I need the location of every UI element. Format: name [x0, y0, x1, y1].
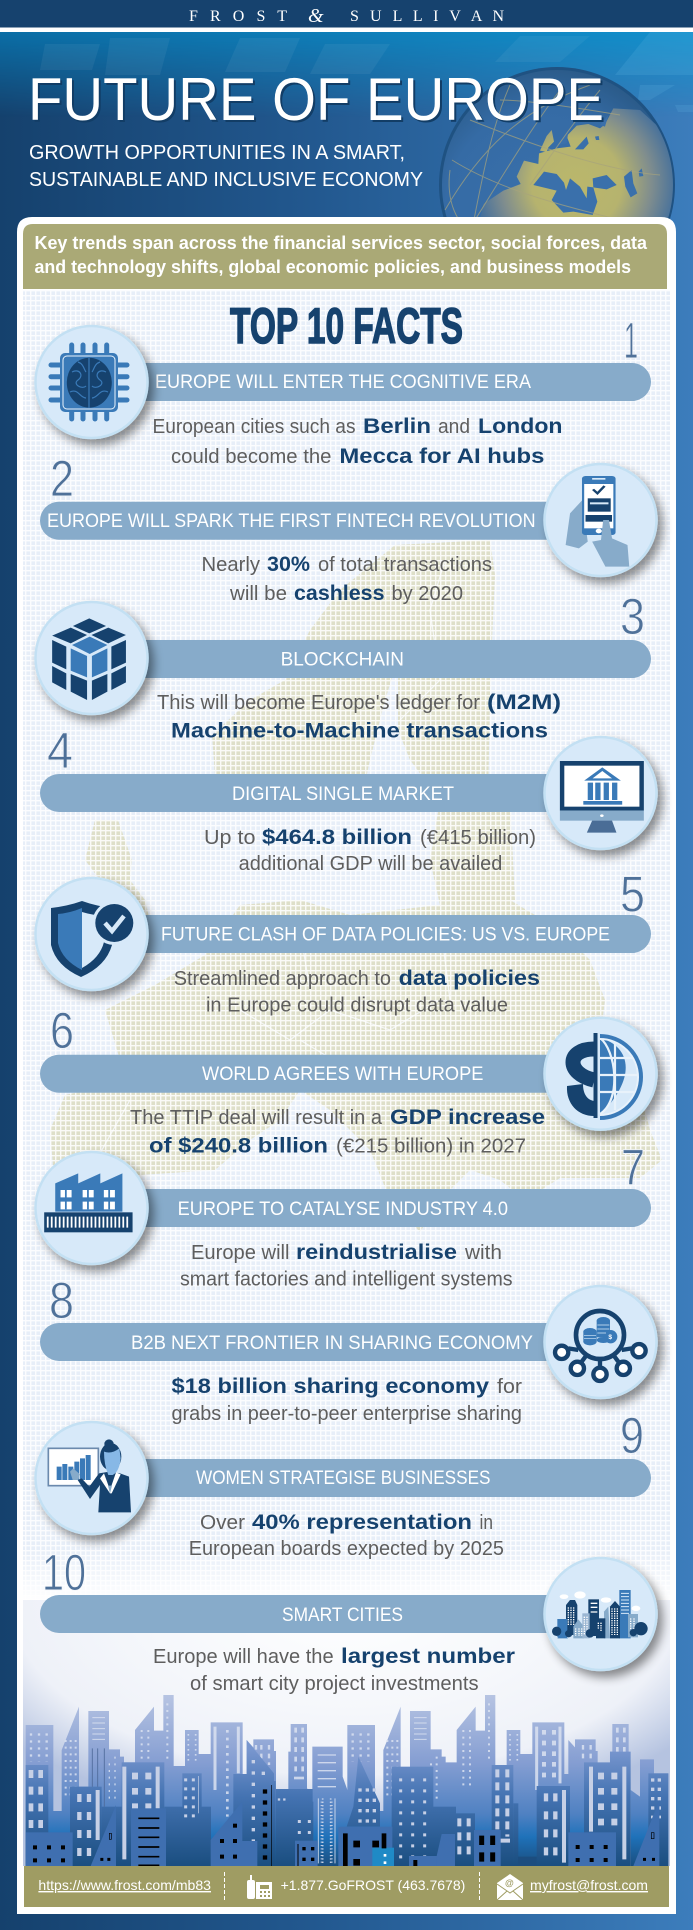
number 4: 4	[47, 722, 73, 779]
icon: chip with brain	[36, 326, 148, 438]
subtitle: SUSTAINABLE AND INCLUSIVE ECONOMY	[29, 168, 423, 191]
number 2: 2	[50, 450, 74, 507]
fact 7 text: reindustrialise	[296, 1240, 457, 1264]
fact 4 text: $464.8 billion	[262, 825, 412, 849]
number 10: 10	[42, 1544, 86, 1601]
fact 5 text: in Europe could disrupt data value	[206, 995, 508, 1017]
pill: fact 4 heading	[40, 774, 600, 812]
subtitle: GROWTH OPPORTUNITIES IN A SMART,	[29, 141, 405, 164]
fact 1 text: could become the	[171, 446, 332, 468]
fact 7 text	[180, 1240, 513, 1291]
icon: bank on monitor	[544, 737, 656, 849]
fact 2 text: of total transactions	[318, 554, 492, 576]
icon: factory	[36, 1152, 148, 1264]
fact 4 text: additional GDP will be availed	[239, 853, 502, 875]
land masses	[480, 108, 680, 220]
fact 7 text: Europe will	[191, 1242, 290, 1264]
fact 5 text: Streamlined approach to	[174, 968, 391, 990]
map of Europe	[50, 540, 662, 1232]
foreground buildings left	[26, 1806, 340, 1866]
fact 6	[40, 1002, 656, 1158]
icon: email: @	[505, 1878, 514, 1888]
fact 3	[36, 588, 651, 743]
icon: globe	[439, 67, 675, 219]
pill: fact 8 heading: B2B NEXT FRONTIER IN SHARING ECONOMY	[131, 1333, 533, 1354]
number 8: 8	[49, 1272, 74, 1329]
illustration: city skyline	[23, 1600, 670, 1866]
fact 1 text: London	[478, 414, 562, 438]
icon: coin network	[544, 1286, 656, 1398]
icon: email	[497, 1874, 523, 1900]
pill: fact 7 heading	[100, 1189, 651, 1227]
back buildings right	[347, 1695, 629, 1866]
fact 9 text	[189, 1510, 504, 1560]
fact 2 text: 30%	[267, 552, 310, 576]
icon: smart city	[544, 1558, 656, 1670]
fact 2 text: by 2020	[392, 583, 463, 605]
number 6: 6	[50, 1002, 74, 1059]
fact 6 text: The TTIP deal will result in a	[130, 1107, 383, 1129]
panel: contact footer	[24, 1866, 669, 1907]
top bar: Frost & Sullivan logo: S U L L I V A N	[350, 8, 504, 25]
fact 2 text	[202, 552, 492, 605]
fact 2 text: cashless	[294, 581, 385, 605]
fact 8 text: $18 billion sharing economy	[172, 1374, 489, 1398]
mid buildings right	[347, 1752, 668, 1866]
fact 1	[36, 312, 651, 468]
fact 3 text: (M2M)	[487, 690, 561, 714]
pill: fact 10 heading	[40, 1595, 600, 1633]
fact 1: 1	[624, 312, 638, 369]
fact 4 text: Up to	[204, 827, 256, 849]
seas	[533, 172, 597, 215]
footer link: https://www.frost.com/mb83	[38, 1877, 211, 1893]
pill: fact 7 heading: EUROPE TO CATALYSE INDUSTRY 4.0	[178, 1199, 508, 1220]
top bar: Frost & Sullivan logo: &	[308, 5, 324, 27]
icon: blockchain cube	[36, 602, 148, 714]
fact 7 text: with	[464, 1242, 502, 1264]
fact 4 text: (€415 billion)	[420, 827, 536, 849]
fact 9 text: European boards expected by 2025	[189, 1538, 504, 1560]
panel: intro olive band	[23, 224, 667, 289]
fact 4 text	[204, 825, 536, 875]
pill: fact 1 heading	[100, 363, 651, 401]
fact 2 text: Nearly	[202, 554, 260, 576]
fact 1 text: and	[438, 416, 470, 438]
fact 7	[36, 1139, 651, 1291]
fact 5 text	[174, 966, 540, 1017]
pill: fact 6 heading: WORLD AGREES WITH EUROPE	[202, 1064, 483, 1085]
fact 10	[40, 1544, 656, 1695]
top bar: Frost & Sullivan logo	[0, 0, 693, 32]
title: FUTURE OF EUROPE	[28, 66, 604, 133]
subtitle	[29, 141, 423, 191]
fact 8 text: for	[497, 1376, 522, 1398]
fact 1 text: Mecca for AI hubs	[339, 444, 544, 468]
pill: fact 4 heading: DIGITAL SINGLE MARKET	[232, 784, 454, 805]
fact 1 text: Berlin	[363, 414, 431, 438]
foreground buildings right	[340, 1800, 659, 1866]
fact 6 text: of $240.8 billion	[149, 1134, 328, 1158]
fact 3 text: Machine-to-Machine transactions	[171, 719, 548, 743]
fact 5	[36, 866, 651, 1017]
top bar: Frost & Sullivan logo: F R O S T	[189, 8, 287, 25]
fact 8 text	[172, 1374, 522, 1425]
fact 8 text: grabs in peer-to-peer enterprise sharing	[172, 1403, 522, 1425]
pill: fact 8 heading	[40, 1323, 600, 1361]
fact 9 text: in	[480, 1512, 493, 1534]
pill: fact 3 heading	[100, 640, 651, 678]
fact 4	[40, 722, 656, 875]
fact 6 text: GDP increase	[390, 1105, 545, 1129]
fact 9	[36, 1407, 651, 1560]
pill: fact 6 heading	[40, 1055, 600, 1093]
pill: fact 9 heading	[100, 1459, 651, 1497]
pill: fact 9 heading: WOMEN STRATEGISE BUSINESSES	[196, 1468, 490, 1489]
fact 10 text	[153, 1644, 516, 1695]
extra back building right	[631, 1759, 668, 1866]
pill: fact 2 heading	[40, 502, 600, 540]
fact 8	[40, 1272, 656, 1425]
number 9: 9	[620, 1407, 644, 1464]
panel: meshed background with Europe map	[23, 290, 670, 1600]
number 3: 3	[620, 588, 645, 645]
pill: fact 10 heading: SMART CITIES	[282, 1605, 403, 1626]
fact 9 text: Over	[200, 1512, 245, 1534]
pill: fact 2 heading: EUROPE WILL SPARK THE FIRST FINTECH REVOLUTION	[47, 511, 536, 532]
pill: fact 5 heading: FUTURE CLASH OF DATA POLICIES: US VS. EUROPE	[161, 925, 610, 946]
panel: intro olive band: and technology shifts, global economic policies, and business models	[34, 257, 631, 277]
fact 10 text: Europe will have the	[153, 1646, 334, 1668]
panel: intro olive band: Key trends span across the financial services sector, social forces, data	[34, 233, 648, 253]
fact 6 text	[130, 1105, 545, 1158]
fact 10 text: largest number	[341, 1644, 516, 1668]
fact 9 text: 40% representation	[252, 1510, 472, 1534]
fact 2 text: will be	[229, 583, 287, 605]
number 7: 7	[621, 1139, 645, 1196]
header backdrop pattern	[0, 32, 693, 117]
number 5: 5	[620, 866, 645, 923]
fact 1 text	[152, 414, 562, 468]
fact 3 text	[157, 690, 561, 743]
pill: fact 5 heading	[100, 915, 651, 953]
fact 1 text: European cities such as	[152, 416, 356, 438]
back buildings left	[26, 1695, 353, 1866]
fact 7 text: smart factories and intelligent systems	[180, 1269, 513, 1291]
fact 2	[40, 450, 656, 605]
icon: dollar and globe	[544, 1018, 656, 1130]
heading: top 10 facts: TOP 10 FACTS	[230, 298, 463, 354]
footer email: myfrost@frost.com	[530, 1877, 648, 1893]
icon: phone	[247, 1875, 272, 1899]
fact 10 text: of smart city project investments	[190, 1673, 479, 1695]
icon: phone and hand	[544, 464, 656, 576]
pill: fact 1 heading: EUROPE WILL ENTER THE COGNITIVE ERA	[155, 372, 531, 393]
title: FUTURE OF EUROPE	[30, 68, 606, 135]
pill: fact 3 heading: BLOCKCHAIN	[281, 650, 404, 671]
fact 5 text: data policies	[399, 966, 540, 990]
mid buildings left	[26, 1740, 313, 1866]
icon: shield with check	[36, 878, 148, 990]
fact 3 text: This will become Europe's ledger for	[157, 692, 480, 714]
icon: coin network: $	[608, 1334, 612, 1341]
icon: businesswoman presenting	[36, 1422, 148, 1534]
fact 6 text: (€215 billion) in 2027	[336, 1136, 526, 1158]
footer phone number: +1.877.GoFROST (463.7678)	[281, 1877, 465, 1893]
